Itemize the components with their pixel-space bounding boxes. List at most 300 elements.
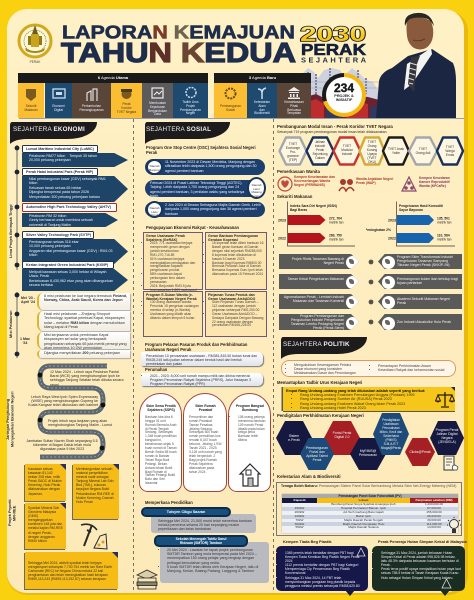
banner: Sejahtera Sosial: SEJAHTERA SOSIAL [146,126,211,133]
agenda: Membuat Keputusan Berpandukan Data [142,83,173,118]
agenda: Kemahiasaan Pihak Berkuasa Tempatan: Tempatan [287,111,301,115]
icon: stack of books [136,570,158,590]
details arrow: 10,000 peluang pekerjaan [29,244,71,248]
pill: Tuisyen Cikgu Sazzan [141,507,231,517]
title [60,22,367,68]
icon: house [238,463,262,487]
heading: OSC: Program One Stop Centre (OSC) Sejahtera Sosial Negeri Perak [146,145,256,155]
stat ring: 234 projek & inisiatif: PROJEK & [334,94,354,98]
box: rang undang-undang: Rang Undang-undang Enakmen Wakaf Orang Islam Perak 2023 [300,402,405,406]
card: GeRAK [143,232,203,290]
hex: TVET Anak Yatim [383,138,409,164]
chart: sayur bayunan: Sayur Bayunan [399,208,423,212]
chart: sayur bayunan: 2023 [388,218,396,222]
hexagon row: TVET programmes: Industri [342,152,353,156]
heading: 3 agenda baru [214,73,311,83]
hexagon row: TVET programmes: Exchange [286,146,300,150]
chart: sayur bayunan: metrik tan [437,238,452,242]
card: misi pelaburan negara [37,293,130,310]
hexagon row: TVET programmes [278,136,464,166]
title: SEJAHTERA [301,56,367,64]
box: tuisyen: Sehingga Mei 2024, 21,500 murid telah menerima bantuan melalui penerima selama 20 hari sepanjang musim peperiksaan dan kelas tambahan [158,519,252,531]
hex: Pendigitalan Usahawan: Perusahaan [382,426,400,430]
pill: SMTDR Tambun [154,535,248,547]
hex: Sistem e-Perak [276,421,312,455]
box: SMTDR [160,542,269,583]
date: Mei 23 - April 24: Mei '23 - [21,296,35,300]
pill: politik objectives: Melaksanakan Dasar dan Perundangan [294,371,356,375]
heading: Tadbir Urus: Memantapkan Tadbir Urus Kerajaan Negeri [277,380,362,385]
bubble: plastik [276,546,368,591]
food row: taman kekal: Taman Kekal Pengeluaran Makanan [288,277,344,281]
label pill: Lumut Maritime Industrial City (LuMIC) [26,147,94,151]
arch card: Skim Sewa: Skim Sewa Pendik Sejahtera (SSPS) [146,404,176,412]
food row: akademi: Akademi Sekuriti Makanan Negeri Perak [397,297,450,305]
bubble tail: hutan [440,591,450,596]
hex: Pendigitalan Usahawan: Sederhana [383,434,399,438]
agenda: Sekuriti Makanan: Makanan [24,108,38,112]
hexagon row: TVET programmes: TVET [343,144,351,148]
note: GMS [25,503,66,549]
heading: 3 agenda baru: 3 Agenda Baru [249,75,276,80]
pill: Tuisyen Cikgu Sazzan: Tuisyen Cikgu Sazzan [167,510,205,514]
details arrow: Menyediakan 300 peluang pekerjaan baharu [29,195,100,199]
pill: politik objectives: Mengukuhkan Keseragaman Pelakui [294,363,351,367]
item: PERWANIS: Kempen Keselamatan dan Kecemerlangan Wanita Negeri (PERWANIS) [294,175,335,187]
OSC pill: Larut: Matang [251,190,262,194]
hex: Pembangunan Portal: Pembangunan [306,446,328,450]
card: misi kerjasama: Misi kerjasama untuk pembinaan Kapal ekspansyen sel solar yang berkapasiti pengeluaran sebanyak 65 juta metrik persegi yang akan menerima 10 GW pemindaian [44,333,127,350]
hex: Pendigitalan Usahawan: Niaga@Perak [381,446,401,450]
icon: recycle plastic [356,547,366,556]
arch card: Program Bangsal Bumbong: 108 orang pekerja menerima bantuan 109 rumah Perak dibaiki pada bulan ketiga peka Bantuan lebih dibina [238,415,266,442]
card: Sukan Wanita: 130 orang usahawan wanita. [150,300,192,304]
food row: kolam ikan: Pembangunan kolam ikan tertutup bagi tujuan pertanian [397,277,458,285]
bubble: plastik: Sehingga 31 Mac 2024, 14 PBT telah menyumbangkan pungutan beg plastik kepada pengguna melalui premis sebanyak RM38,620.80 [285,576,360,588]
agenda: Pembangunan Sosial [214,83,247,118]
icon: Perak state crest: PERAK [30,60,41,64]
icon: pickaxe and rocks [80,523,108,550]
details arrow: Pembangunan seluas 316 ekar [29,240,79,244]
road text: Tanjong Malim Lumut: Projek lebuh raya lanjutan yang akan menghubungkan Tanjong Malim - Lumut [48,419,112,427]
arch card: Skim Rumah Pewakaf: Pemurnihan dan rumah Pewakaf Taman Pesakas Jelaing Sedang. Sebanyak 500 buah rumah pemulihan kos rendah 6,347 buah kekunci, Jelaing 1,934 Tanah 2021 - 2023: 3,126 unit rumah yang telah berpindah. 2 Bagi projek Rumah Perak Sejahtera dilancarkan pada tahun 2024 [189,415,222,474]
hex: Pendigitalan Usahawan: Pendigitalan [382,418,400,422]
OSC pill: Kerian: Perak [151,213,158,217]
banner: Sejahtera Sosial [145,122,230,144]
portrait: man in suit [376,12,456,118]
agenda: Kelestarian Alam dan Biodiversiti: dan [259,108,265,112]
icon: light bulb [447,517,461,533]
hex: JENDELA: Program Perak [436,428,459,432]
food row: agromakanan [279,294,359,309]
details arrow: Keluasan tanah seluas 65 hektar [29,186,81,190]
details arrow [22,213,118,227]
chart: ISSN beras: metrik tan [329,220,344,224]
road text: WCE: 12 Mac 2024 - Lebuh raya Pesisiran Pantai Barat (WCE) yang menghubungkan Ipoh ke sehingga Tanjong Selatan telah dibuka secara rasmi [50,370,123,387]
pill: politik objectives: Kesediaan Rakyat dan keharmonian sosial [378,368,444,372]
heading: Pendigitalan: Pendigitalan Perkhidmatan Kerajaan Negeri [277,413,364,418]
bubble tail: plastik [346,591,354,596]
box: SMTDR: 5 buah SMTDR telah ditinta oleh Kerajaan Negeri, iaitu di Manjung, Kerian, Batang Padang, Larggong & Tambun [167,565,258,573]
hex: JENDELA: Negara [441,436,453,440]
arch card: Program Bangsal Bumbong: Program Bangsal Bumbong [236,404,264,412]
hex: Pendigitalan Usahawan: S.M.A.R.T [384,442,398,446]
OSC pill: Kerian [145,202,265,217]
agenda: Kemahiasaan Pihak Berkuasa Tempatan: Berkuasa [287,108,301,112]
label: Misi Pelaburan: Misi Pelaburan [8,310,13,338]
hexagon row: TVET programmes: Upaya [367,152,377,156]
hex: TVET Exchange [280,138,306,164]
hexagon row: TVET programmes: TVET [289,142,297,146]
chart: sayur bayunan: metrik tan [437,220,452,224]
pill: politik objectives: Pemantapan Perkhidmatan Awam [378,364,431,368]
card: misi pelaburan negara: 8 misi pelaburan ke luar negara termasuk Finland, Norway, China, Arab Saudi, Korea dan Jepun [44,294,127,302]
OSC pill: Larut: Larut [253,186,260,190]
hexagon row: TVET programmes: Orang [368,144,377,148]
agenda: Kemahiasaan Pihak Berkuasa Tempatan: Kemahiasaan [284,100,304,104]
agenda: Membuat Keputusan Berpandukan Data: Berpandukan [148,109,167,113]
OSC pill: Larut: Februari 2024 di Pusat Latihan Teknologi Tinggi (ADTEC), Taiping. Lebih daripada 1,700 orang pengunjung dan 24 agensi pemberi bantuan, 3 penilaian waktu yang sebaiknya hadir. [150,181,244,198]
item: WAP [338,177,394,192]
box: rang undang-undang: Rang Undang-undang Sumber Air (RUUSA) Perak 2023 [300,397,392,401]
bubble: hutan [372,546,465,591]
details arrow: Pelaburan RM77 bilion Tempoh 35 tahun [29,154,97,158]
food row: lembu pedaging [279,314,359,330]
food row: skim transformasi [378,254,462,269]
agenda: Perak Koridor TVET Negara [111,83,142,118]
heading: Sekuriti Makanan: Sekuriti Makanan [277,194,312,199]
hexagon row: TVET programmes: Warga [445,149,455,153]
label: Jaringan Penghubung: Jaringan Penghubung Menyegarkan Ekonomi Negeri [5,391,14,447]
illustration: Perak skyline [303,68,379,118]
bubble: hutan: Perak terus positif upaya menjadikan hutan paya laut seluas 758.5 hektar di Tanah Kerajaan Kuala Kurau Hulu sebagai Hutan Simpan Kekal yang baharu. [381,567,461,580]
OSC pill: Kampung: Manjung [149,168,160,172]
heading: 6 agenda utama: 6 Agenda Utama [98,75,128,80]
chart: sayur bayunan: 135, 501 [437,216,450,220]
agenda: Kelestarian Alam dan Biodiversiti: Biodiversiti [254,111,270,115]
item: PERWANIS [277,175,335,192]
heading: pelaxan pasaran: Program Pelaxan Pasaran Produk dan Perkhidmatan Usahawan Negeri Perak [145,342,247,352]
box: rang undang-undang: Rang Undang-undang Hotel Perak 2023 [300,406,366,410]
card: GeRAK: 88% usahawan dapat perkongsian ilmu dalam pemasaran [150,272,185,284]
label pill [22,168,98,176]
food row: taman kekal [279,274,359,289]
heading: Kelestarian Alam: Kelestarian Alam & Biodiversiti [277,474,341,478]
chart: ISSN beras: Bagi Beras [290,208,307,212]
hex: Pendigitalan Usahawan: Usahawan [383,422,399,426]
agenda: Sekuriti Makanan [18,83,44,118]
hex: MyRIMS [350,438,386,470]
agenda: Tadbir Urus Projek Pembangunan Negeri: Negeri [186,111,195,115]
date: 1 Mac 24: 1 Mac [20,337,30,341]
note: kawasan [25,464,66,501]
title: PERAK [301,42,367,59]
text: tenaga: Tenaga Boleh Baharu: Pemasangan Sistem Panel Solar Berbumbung Melalui Skim Net-Energy Metering (NEM) [281,484,456,488]
details arrow [22,176,128,202]
note: eksport REC [25,552,118,589]
hexagon row: TVET programmes: TVET Anak [388,147,404,151]
hexagon row: TVET programmes: Jalinan [315,140,325,144]
project: LuMIC [22,145,128,167]
label pill [22,203,117,212]
hexagon row: TVET programmes: Orang Asli [416,151,431,155]
OSC pill: Kampung: 11 November 2023 di Dewan Merdeka, Manjung dengan sifirasikan lebih daripada 1,500 orang pengunjung dan 30 agensi pemberi bantuan [165,160,257,173]
hex: Pendigitalan Usahawan: (PMKS) [385,438,397,442]
pill: peruntukan: Peruntukan 10 perusahaan usahawan - RM381,815.50 bukan tunai dan RM28,245 iaitu jualan sebenar dalam bentuk hasil dari bentuk pembekalan dan jualan [146,354,257,366]
hexagon row: TVET programmes: (TVET [367,156,377,160]
chart: ISSN beras [278,202,355,246]
project: KIGIP [22,261,128,291]
project: PHIP [22,168,128,202]
agenda: Tadbir Urus Projek Pembangunan Negeri: Tadbir Urus [182,100,199,104]
box: rang undang-undang [283,387,455,411]
divider base line [19,118,464,119]
hex: Jalinan Industri [306,138,334,164]
hex: JENDELA [430,421,464,455]
agenda: Pertumbuhan: Pertumbuhan [82,104,101,108]
hexagon row: TVET programmes: Sejumlung [312,152,328,156]
hexagon row: TVET programmes: TVET [446,145,454,149]
note: makmal: Membangunkan sebuah makmal penyelidikan mineral nadir sebagai: Tanjung Mineral Lab Sdn Bhd (TML), sukuran kepujian Negara Bukit Pekambuhan RM-REE di Mukim Kenering, Daerah Hulu Perak [76,467,114,504]
card: peluang pekerjaan: Dijangka menyediakan 200 peluang pekerjaan [44,351,120,355]
hexagon row: TVET programmes: Dalam [315,156,325,160]
hexagon row: TVET programmes: Yatim [392,151,400,155]
infographic: serpentine road [38,364,107,460]
label pill [22,261,114,269]
hex: Portal Perak Digital [324,421,360,455]
agenda: Pertumbuhan: Pemangkupanan [79,108,104,112]
stat ring: 234 projek & inisiatif [322,73,366,117]
pill: perumahan: 2021 - 2023: 8,000 unit rumah mampu milik dan dibina menerusi Program Perumahan Rakyat Sejahtera (PRRS), Jalur Hadapan 3 Program Perumahan Rakyat (PPR) [150,374,251,386]
note: makmal [73,464,119,519]
label: Projek Pryoriti MR-REE: Projek Pryoriti MR-REE [7,500,16,526]
label: Lima Projek Berimpak Tinggi: Lima Projek Berimpak Tinggi [8,204,13,258]
hex: Portal Perak Digital: Digital 2.0 [334,435,350,439]
card: Geran Bantuan: Geran Bantuan Pembangunan Gerakan Koperasi [208,234,258,242]
label pill [22,231,94,239]
chart: ISSN beras: 2023 [278,218,286,222]
card: GeRAK: 51% usahawan berjaya meningkatkan pendapatan dan menghasilkan kapasiti pengeluaran produk [150,257,195,272]
card: Geran Bantuan: Bantuan bagi Koperasi RM500,00 Bermula Pusaran Jalur di Daerah Bersama Koperasi Guru Ipoh telah dilancarkan pada 15 Februari 2024 [212,261,263,276]
pill: SMTDR Tambun: Sekolah Menengah Tahfiz Darul [176,537,226,541]
details arrow: Dijangka beroperasi pada tahun 2026 [29,190,89,194]
box: SMTDR: 20 Mei 2024 : Lawatan ke tapak projek pembangunan SMTDR Tambun yang mula beroperasi pada Mei 2024 – menempatkan 150 orang pelajar yang lengkap dengan pelbagai kemudahan yang sedia. [167,548,257,565]
heading: Kempen Tiada Beg Plastik: Kempen Tiada Beg Plastik [283,539,332,544]
hex: Portal Perak Digital: Portal Perak [333,431,352,435]
item: KPCaRe [401,176,450,192]
agenda: Membuat Keputusan Berpandukan Data: Keputusan [150,105,165,109]
heading: Pembangunan Modal Insan: Pembangunan Modal Insan - Perak Koridor TVET Negara [277,124,393,129]
heading: Pengupayaan Ekonomi Rakyat: Pengupayaan Ekonomi Rakyat - Keusahawanan [146,225,239,230]
chart: sayur bayunan: 2022 [388,236,396,240]
hex: Sistem e-Perak: e-Perak [288,438,300,442]
agenda: Ekonomi Digital: Digital [54,108,63,112]
hex: Clicks Perak: Clicks@Perak [409,450,431,454]
agenda: Kelestarian Alam dan Biodiversiti [247,83,277,118]
agenda: Ekonomi Digital: Ekonomi [52,104,65,108]
chart: sayur bayunan: 110, 584 [437,234,450,238]
label pill: Silver Valley Technology Park (SVTP) [26,233,91,237]
hex: Pembangunan Portal: Perak [313,458,322,462]
food row: projek rintis [279,254,359,269]
hex: Pendigitalan Usahawan [373,413,409,455]
hex: TVET Modular [334,138,360,164]
heading: Pemerkasaan Wanita: Pemerkasaan Wanita [277,169,320,174]
project: SVTP [22,231,128,264]
agenda: Membuat Keputusan Berpandukan Data: Membuatan [149,101,166,105]
agenda: Pembangunan Sosial: Sosial [226,108,235,112]
card: Geran Bantuan: 8 koperasi telah dibubarkan di bawah 5 Daerah 2023 [212,253,256,261]
bubble: plastik: 1112 premis berdaftar dengan PBT bagi Kategori Memperniaga Cip Pencemaran Beg Plastik Konvensional [285,563,358,575]
hexagon row: TVET programmes: TVET [419,147,427,151]
hex: Clicks Perak [405,438,435,466]
timeline: misi pelaburan [14,292,20,358]
details arrow: Meliputi kawasan seluas 3,000 hektar di Wilayah Utara, Perak [29,270,107,278]
arch card: Program Bangsal Bumbong [228,393,271,492]
food row: zon akuakultur: Zon Industri Akuakultur Hulu Perak [397,320,451,324]
banner: Sejahtera Ekonomi: SEJAHTERA EKONOMI [13,126,85,133]
chart: ISSN beras: 272, 764 [329,216,342,220]
table: panel solar: Pemasangan Panel Solar Fotovoltaik (PV) [338,494,402,498]
chart: ISSN beras: 2022 [278,236,286,240]
icon: phone [444,456,458,470]
timeline dots: food rows [368,260,374,324]
agenda: Tadbir Urus Projek Pembangunan Negeri: Pembangunan [180,108,201,112]
card: hasil misi pelaburan: Hasil misi pelaburan – Zhejiang Sinoport Technology, syarikat pembuat Kapal, ekspansyen solar – melabur RM3 bilion dengan menubuhkan kilang kapal di Perak [44,312,125,329]
OSC pill: Kerian: 2 Jun 2024 di Dewan Serbaguna Majlis Daerah Gerik. Lebih daripada 1,000 orang pengunjung dan 36 agensi pemberi bantuan [165,203,261,216]
hex: JENDELA: Jalinan Digital [436,432,458,436]
hexagon cluster: digital services [276,413,464,470]
card: Sukan Wanita: Peruntuk 15 pengeluar cadangan mereka di setiap (e-Wanita) [150,304,199,312]
details arrow [22,269,128,291]
date: Mei 23 - April 24 [21,296,35,304]
card: Geran Bantuan: 16 koperasi telah diberi bantuan 16 Baseli geran bantuan di Daerah dengan nilai sejumlah RM285,000 [212,241,264,253]
food row: lembu pedaging: Program Pembangunan dan Pengukuhan Industri Pengeluaran Tanaman Lembu Pedaging Negeri Perak (Perak Stern) [291,314,344,330]
hexagon row: TVET programmes: OKU) [368,160,376,164]
timeline: projects spine [14,145,20,270]
dashed column dividers [133,119,274,590]
agenda: Tadbir Urus Projek Pembangunan Negeri [173,83,208,118]
card: Sukan Wanita [143,291,203,337]
item: KPCaRe: Kempen Kesedaran Kanser Reproduktif Wanita (KPCaRe) [419,176,450,188]
title: 2030 [300,23,366,46]
hexagon row: TVET programmes: gramme [287,154,299,158]
panel: tenaga boleh baharu [276,482,462,536]
table: panel solar [282,494,458,533]
stat ring: 234 projek & inisiatif: 234 [334,81,354,95]
arch card: Skim Rumah Pewakaf [183,393,227,492]
hexagon row: TVET programmes: Emas [446,153,454,157]
heading: 6 agenda utama [18,73,208,83]
label pill: Kerian Integrated Green Industrial Park (KIGIP) [26,263,108,267]
hexagon row: TVET programmes: Pro- [290,150,296,154]
title: TAHU N KEDUA [61,37,296,68]
hexagon row: TVET programmes: TVET [368,140,376,144]
arch card: Skim Sewa: Bantuan kira-kira 6 hingga 31 unit Rumah Bermula Arah di Perak Tengah Sedang. Sebanyak 1,048 buah pemilihan bangsal ini, kebaharuan sejak 5 buah rumah di Taman Bersih Sedia 58 buah rumah di Bandar Tebari Raja Budi Pelangi. Belum. Antara lokasi Bukit Bagi Rumah di Taman Pelangi Bukit Batu dan Seri Iskandar [145,415,177,485]
card: GeRAK: Geran Usahawan Perak Sejahtera (GeRAK) [146,234,185,242]
arch card: Skim Sewa [139,393,182,492]
note: GMS: Syarikat Mineral Sdn Geoviera Malaysia (GMS) menganggarkan komitmen 148 juta dan melalui kajian RM-REE di negeri Perak, dengan anggaran RM40 billion [28,506,63,543]
hexagon row: TVET programmes: (TEP) [289,158,297,162]
food row: projek rintis: Projek Rintis Tanaman Bawang di Negeri Perak [292,257,344,265]
icon: scales of justice [435,392,455,408]
banner: Sejahtera Ekonomi [10,122,97,144]
agenda: Membuat Keputusan Berpandukan Data: Data [154,112,161,116]
label pill: Automotive High Park Technology Valley (AHTV) [26,205,111,209]
note: eksport REC: Sehingga Mei 2024, aktiviti syarikat telah berjaya mengeksport sebanyak 7,730.754 metrik tan Rare Earth Carbonate (REC) ke Negara China melalui 22 kali penghantaran dan telah meningkatkan hasil kerajaan RM59,113,243 (RM59,113,192.87) selaras kerajaan [28,561,112,581]
note: kawasan: Kawasan seluas kawasan 81,142 hektar 208 ekar, milik Perak SADC di Mukim Kenering, Hulu Perak dilaksanakan dengan Jepaman. [28,467,62,496]
agenda: Perak Koridor TVET Negara: TVET Negara [117,110,136,114]
details arrow: Anggaran nilai pembangunan kasar (GDV) : RM1.03 bilion [29,249,113,257]
label pill: Perak Halal Industrial Park (Perak HIP) [26,170,93,174]
card: Sukan Wanita: Program E-Sukan Wanita (e-Wanita) Kerajaan Negeri Perak [146,293,197,301]
agenda: Tadbir Urus Projek Pembangunan Negeri: Projek [186,104,195,108]
card: Sukan Wanita: Usahawan yang dilatih akan dibantu dalam tempoh 6 bulan. [150,312,195,320]
pill: politik objectives: Dasar ekonomi yang konsisten [294,367,342,371]
date: 1 Mac 24: '24 [23,341,27,345]
agenda: Pertumbuhan [72,83,111,118]
hexagon row: TVET programmes: Kurang [367,148,377,152]
chart: ISSN beras: metrik tan [329,238,344,242]
card: Pinjaman Tunai: Geran Usahawan AishADOO – Sesiapa Daripada Dengan Bawang 22 orang usahawan dengan peruntukan RM166,228.00 [212,312,264,327]
box: tuisyen [151,514,256,533]
hex: Pendigitalan Usahawan: Mikro, Kecil dan [380,430,403,434]
stat ring: 234 projek & inisiatif: INISIATIF [336,98,352,102]
road text: Jambatan: Jambatan Sultan Nazrin Shah sepanjang 5.5 kilometer di Bagan Datuk telah mula digunakan pada 9 Mei 2023 [26,439,98,451]
OSC pill: Larut: Selama [251,194,262,198]
chart: ISSN beras: Indeks Sara Diri Negeri (ISSN) [290,204,337,208]
agenda: Pembangunan Sosial: Pembangunan [220,104,241,108]
food row: zon akuakultur [378,314,462,330]
hexagon row: TVET programmes: Modular [341,148,354,152]
details arrow: 20,000 peluang pekerjaan [29,158,71,162]
agenda: Ekonomi Digital [45,83,72,118]
date: 1 Mac 24 [20,337,30,345]
OSC pill: Kerian: Hulu [151,210,158,214]
chart: sayur bayunan: Pengeluaran Hasil Komoditi [399,204,443,208]
arch card: Skim Rumah Pewakaf: Skim Rumah Pewakaf [195,404,216,412]
hex: Sistem e-Perak: Sistem [289,434,299,438]
hex: MyRIMS: MyRIMS@ [360,449,377,453]
hex: Pembangunan Portal: Aplikasi Talent [306,454,328,458]
agenda: Sekuriti Makanan: Sekuriti [26,104,36,108]
hex: Pembangunan Portal [300,438,334,470]
title: LAPORA N KEMAJUAN [62,22,295,42]
heading: Hutan Simpan Kekal: Perak Peneraju Hutan Simpan Kekal di Malaysia [378,539,467,544]
card: GeRAK: 2024: Berjumlah RM3.5 juta (menyasarkan 1,800 usahawan) [150,284,197,292]
road text: WISE: Lebuh Raya West Ipoh Spien Expressway (WISE) yang menghubungkan Gopeng ke Kuala Kangsar telah diluluskan oleh kabinet [28,395,98,407]
details arrow: Nilai pembangunan kasar (GDV) sebanyak RM1 bilion [29,177,106,185]
food row: kolam ikan [378,274,462,289]
details arrow [22,153,128,167]
agenda: Perak Koridor TVET Negara: Koridor [121,106,132,110]
OSC pill: Kampung: Daerah [150,164,159,168]
icon: recycle tree [441,578,452,588]
subheading: program modal insan: Sebanyak 719 program pembangunan modal insan telah dilaksanakan [277,130,387,134]
hex: TVET Orang Asli [409,138,437,164]
agenda: Kelestarian Alam dan Biodiversiti: Kelestarian [254,100,270,104]
details arrow: Geely berhasrat untuk membina sebuah universiti di Tanjung Malim [29,218,93,227]
OSC pill: Kerian: Daerah [150,206,159,210]
details arrow: Pelaburan RM 32 bilion [29,214,66,218]
box: rang undang-undang: Rang Undang-undang Enakmen Pemulangan Unggas (Pindaan) 1993 [300,393,415,397]
food row: skim transformasi: Program Skim Transformasi Industri Pengeluaran Tanaman Sampang Tikunan Negeri Perak (SKKIP-Sti) [397,255,453,267]
bubble: hutan: Sehingga 31 Mac 2024, jumlah keluasan Hutan Simpan Kekal di Perak adalah 998,826.98 hektar, iaitu 48.3% daripada keluasan kawasan berhutan di Perak. [381,551,459,567]
heading: Memperkasa Pendidikan: Memperkasa Pendidikan [145,500,193,505]
food row: agromakanan: Agromakanan Perak - Lembah Industri Makanan dan Tanaman Komersil [284,295,344,303]
date: Mei 23 - April 24: April '24 [21,300,35,304]
hex: TVET Orang Kurang Upaya [360,138,384,164]
